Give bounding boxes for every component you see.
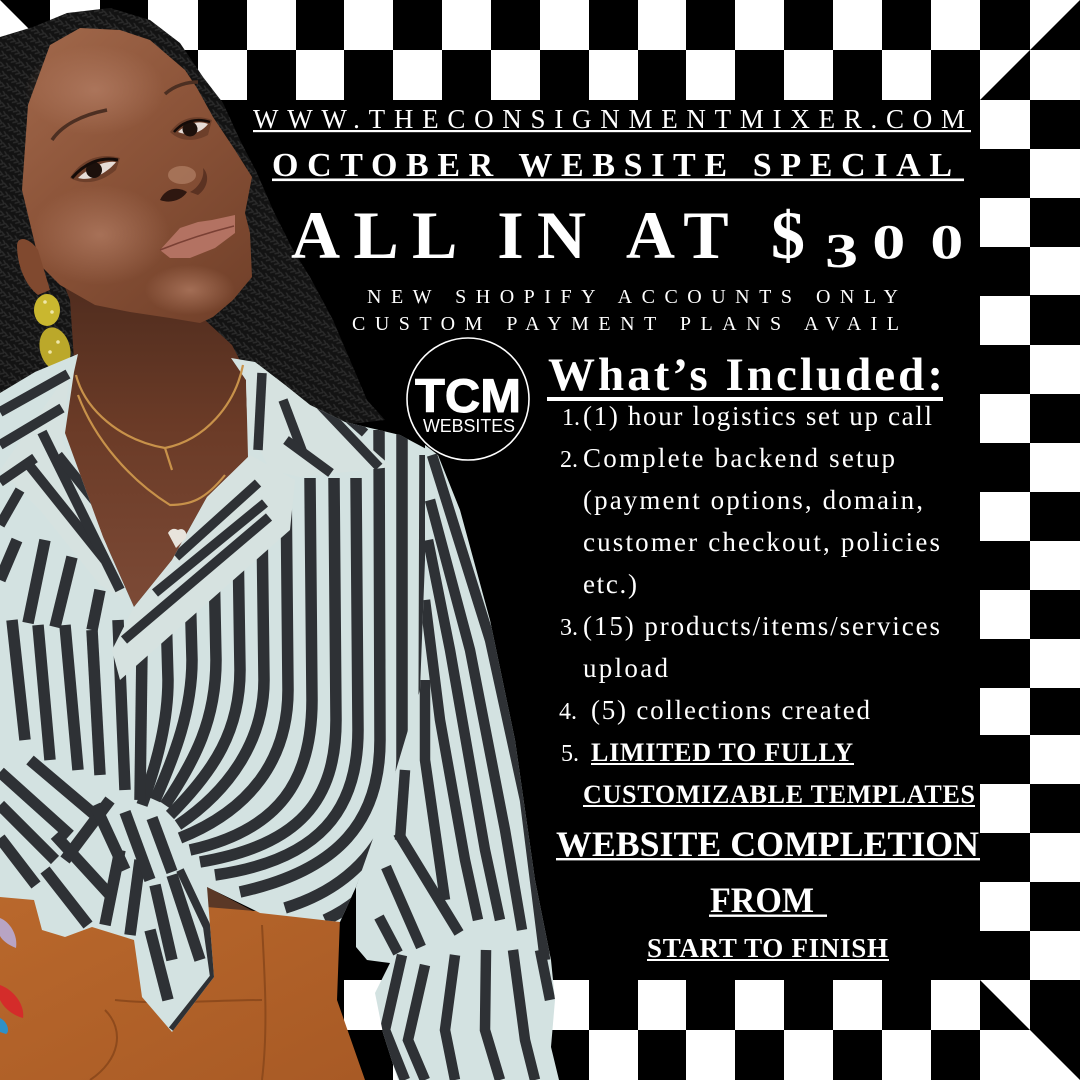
- closing statement: WEBSITE COMPLETION: [556, 824, 979, 864]
- neck and chest: [60, 280, 250, 607]
- logo: TCM websites: TCM: [415, 369, 521, 422]
- photo: woman in striped shirt: [0, 8, 565, 1080]
- tail edge: [172, 870, 214, 1030]
- website url heading: WWW.THECONSIGNMENTMIXER.COM: [253, 104, 965, 134]
- painted nails: [0, 918, 23, 1034]
- left shoulder and collar: [98, 524, 108, 547]
- closing statement: START TO FINISH: [647, 933, 888, 963]
- included list: LIMITED TO FULLY: [591, 738, 853, 767]
- skirt folds: [90, 925, 265, 1080]
- upper eye: [170, 117, 212, 140]
- closing statement: FROM: [710, 880, 814, 920]
- included list: upload: [583, 653, 668, 683]
- face highlights: [25, 45, 235, 315]
- october special heading: OCTOBER WEBSITE SPECIAL: [272, 147, 952, 184]
- lower eye: [70, 156, 120, 182]
- included list: CUSTOMIZABLE TEMPLATES: [583, 780, 975, 809]
- what's included heading: What’s Included:: [548, 349, 943, 401]
- skirt: [0, 890, 365, 1080]
- included list: customer checkout, policies: [583, 527, 940, 557]
- shirt torso: [0, 354, 425, 1032]
- placket band: [112, 455, 295, 680]
- price headline: ALL IN AT $: [291, 197, 805, 273]
- face: [22, 28, 252, 323]
- shopify note line one: NEW SHOPIFY ACCOUNTS ONLY: [367, 286, 898, 308]
- included list: 3.: [560, 615, 578, 641]
- placket stripes: [124, 483, 269, 640]
- price headline: 300: [825, 214, 963, 278]
- midriff: [170, 870, 270, 935]
- included list: Complete backend setup: [583, 443, 895, 473]
- included list: [559, 401, 975, 809]
- eyebrows: [52, 82, 198, 140]
- included list: 4.: [559, 699, 577, 725]
- closing statement: [556, 824, 980, 963]
- nose: [160, 166, 207, 202]
- included list: 2.: [560, 447, 578, 473]
- earrings: [34, 294, 75, 374]
- included list: 5.: [561, 741, 579, 767]
- heart pendant: [168, 529, 186, 548]
- included list: 1.: [562, 405, 580, 431]
- hair: [0, 8, 385, 425]
- right collar: [242, 364, 385, 469]
- included list: (15) products/items/services: [583, 611, 940, 641]
- included list: (payment options, domain,: [583, 485, 923, 515]
- lip line: [160, 226, 234, 250]
- lips: [160, 215, 235, 258]
- torso stripes: [0, 430, 425, 1000]
- logo: TCM websites: [407, 338, 529, 460]
- logo: TCM websites: WEBSITES: [423, 416, 515, 436]
- ear: [17, 239, 50, 295]
- included list: (5) collections created: [591, 695, 870, 725]
- shirt sleeve: [350, 440, 565, 1080]
- included list: (1) hour logistics set up call: [583, 401, 932, 431]
- sleeve stripes: [379, 455, 550, 1080]
- right collar stripes: [258, 373, 379, 473]
- necklaces: [76, 365, 243, 505]
- included list: etc.): [583, 569, 637, 599]
- shopify note line two: CUSTOM PAYMENT PLANS AVAIL: [352, 313, 899, 335]
- collar stripes: [0, 374, 120, 590]
